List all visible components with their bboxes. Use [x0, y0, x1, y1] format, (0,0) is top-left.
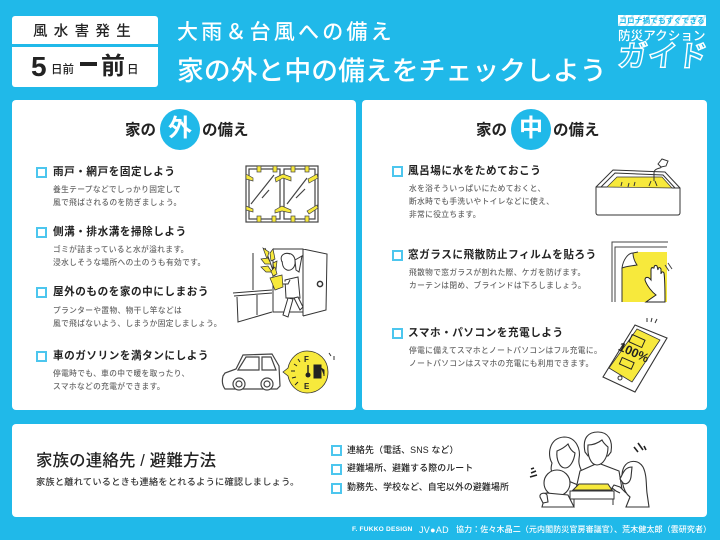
icon: full fuel gauge: E [304, 382, 310, 391]
icon: car [222, 353, 281, 391]
checkbox [36, 167, 47, 178]
icon: full fuel gauge [282, 350, 334, 394]
logo tagline: コロナ禍でもすぐできる [619, 16, 705, 25]
heading circle [160, 109, 200, 150]
checkbox [392, 250, 403, 261]
icon: smartphone at 100 percent [602, 318, 668, 393]
check item 3 [331, 482, 509, 494]
item heading: 屋外のものを家の中にしまおう [53, 286, 209, 298]
label: 勤務先、学校など、自宅以外の避難場所 [347, 482, 509, 492]
item body: ゴミが詰まっていると水が溢れます。 [53, 245, 189, 254]
label: 避難場所、避難する際のルート [347, 463, 473, 473]
item body [409, 268, 586, 290]
checklist [331, 445, 509, 494]
badge divider [12, 44, 158, 47]
checkbox [392, 328, 403, 339]
item body [53, 185, 182, 207]
family contact body: 家族と離れているときも連絡をとれるように確認しましょう。 [36, 477, 299, 487]
checkbox [331, 483, 342, 494]
item body: スマホなどの充電ができます。 [53, 382, 165, 391]
family contact heading: 家族の連絡先 / 避難方法 [36, 452, 216, 470]
heading circle: 中 [519, 115, 543, 142]
icon: smartphone at 100 percent: 100% [616, 340, 651, 365]
days before small: 日前 [51, 64, 74, 76]
footer credits [352, 525, 711, 535]
heading text right: の備え [202, 122, 249, 139]
panel: inside preparations [362, 100, 707, 410]
item: gutters [36, 226, 206, 267]
item body: 飛散物で窓ガラスが割れた際、ケガを防げます。 [409, 268, 586, 277]
icon: bathtub with water [596, 158, 680, 216]
day small: 日 [127, 64, 138, 76]
title line 1: 大雨＆台風への備え [177, 21, 395, 44]
item: window film [392, 248, 597, 290]
item heading: 窓ガラスに飛散防止フィルムを貼ろう [408, 249, 597, 261]
item: fill gas [36, 350, 209, 391]
item body: ノートパソコンはスマホの充電にも利用できます。 [409, 359, 594, 368]
heading circle [511, 109, 551, 150]
icon: family checking a map [530, 432, 650, 508]
title [177, 20, 607, 86]
checkbox [331, 445, 342, 456]
item body: 風で飛ばされるのを防ぎましょう。 [53, 198, 182, 207]
check item 2 [331, 463, 473, 475]
number 5: 5 [31, 51, 47, 82]
item heading: 車のガソリンを満タンにしよう [53, 350, 209, 362]
item body [53, 369, 190, 391]
item heading: 雨戸・網戸を固定しよう [53, 166, 176, 178]
logo FUKKO DESIGN: F. FUKKO DESIGN [352, 526, 413, 533]
checkbox [331, 464, 342, 475]
checkbox [392, 166, 403, 177]
item: bring things inside [36, 286, 222, 328]
item body [53, 306, 222, 328]
icon: full fuel gauge: F [304, 355, 309, 364]
heading text right: の備え [553, 122, 600, 139]
checkbox [36, 287, 47, 298]
item body: 停電時でも、車の中で暖を取ったり、 [53, 369, 190, 378]
item body [409, 346, 602, 368]
item heading: スマホ・パソコンを充電しよう [408, 327, 564, 339]
long dash [80, 62, 97, 66]
item body [409, 184, 554, 219]
logo JVOAD: JV●AD [419, 525, 449, 535]
item body: 非常に役立ちます。 [409, 210, 481, 219]
item: charge devices [392, 326, 602, 368]
item: fill bath [392, 164, 554, 219]
panel: outside preparations [12, 100, 356, 410]
item: shutters [36, 166, 182, 207]
title line 2: 家の外と中の備えをチェックしよう [177, 56, 607, 86]
item body: プランターや置物、物干し竿などは [53, 306, 182, 315]
item body: 断水時でも手洗いやトイレなどに使え、 [409, 197, 554, 206]
checkbox [36, 351, 47, 362]
item heading: 側溝・排水溝を掃除しよう [53, 226, 187, 238]
credit text: 協力：佐々木晶二（元内閣防災官房審議官）、荒木健太郎（雲研究者） [456, 525, 711, 534]
logo: disaster prevention action guide [616, 15, 710, 73]
item body: 風で飛ばないよう、しまうか固定しましょう。 [53, 319, 222, 328]
item body: 停電に備えてスマホとノートパソコンはフル充電に。 [409, 346, 602, 355]
item body: 養生テープなどでしっかり固定して [53, 185, 181, 194]
item body [53, 244, 206, 267]
check item 1 [331, 445, 459, 456]
heading text left: 家の [476, 122, 507, 139]
item body: カーテンは閉め、ブラインドは下ろしましょう。 [409, 281, 586, 290]
item heading: 風呂場に水をためておこう [408, 165, 541, 177]
logo line 1: 防災アクション [618, 29, 706, 43]
heading circle: 外 [168, 115, 192, 142]
logo line 2: ガイド [616, 41, 710, 73]
item body: 浸水しそうな場所への土のうも有効です。 [53, 258, 206, 267]
label: 連絡先（電話、SNS など） [347, 445, 459, 455]
icon: window with film and hand [612, 242, 672, 302]
badge heading: 風水害発生 [33, 24, 137, 40]
icon: taped window [245, 165, 319, 223]
panel: family contact [12, 424, 707, 517]
panel heading: inside [476, 109, 600, 150]
checkbox [36, 227, 47, 238]
item body: 水を浴そういっぱいにためておくと、 [409, 184, 546, 193]
before large: 前 [101, 53, 125, 80]
badge timing [31, 51, 138, 82]
icon: person carrying a plant inside [232, 247, 328, 323]
panel heading: outside [125, 109, 249, 150]
badge: 5 days before [12, 16, 158, 87]
heading text left: 家の [125, 122, 156, 139]
